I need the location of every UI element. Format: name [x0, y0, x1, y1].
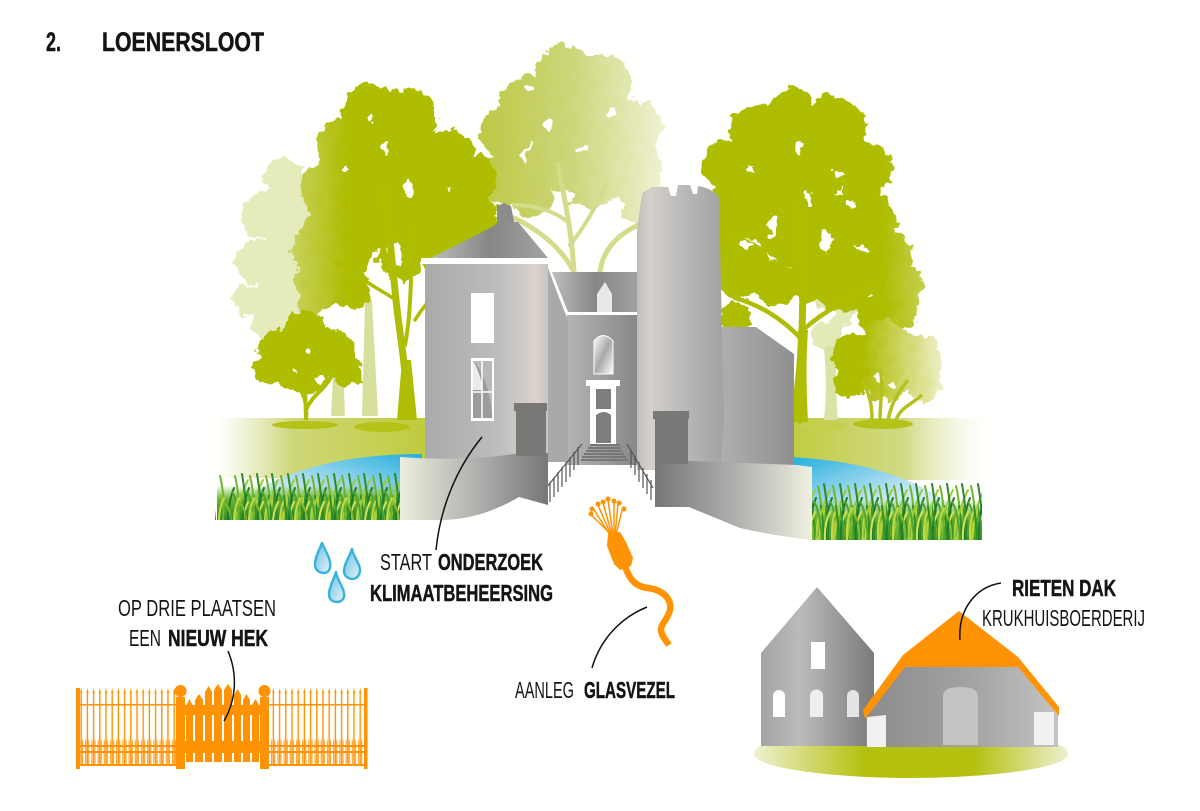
title [46, 27, 264, 57]
chimney [497, 203, 515, 226]
reeds right [812, 480, 982, 540]
tree: large right [700, 88, 923, 422]
reeds left [215, 473, 400, 520]
barn door [943, 687, 978, 745]
gate [174, 684, 270, 769]
tree: large left [290, 84, 499, 420]
pillar right [653, 411, 689, 464]
label: GLASVEZEL [584, 677, 675, 703]
ground right [785, 418, 983, 480]
leader line [224, 651, 234, 721]
label: OP DRIE PLAATSEN [118, 595, 276, 621]
callout: fibre [515, 607, 675, 703]
right tower [637, 185, 724, 470]
callout: thatched roof [960, 575, 1145, 640]
railings [546, 444, 653, 502]
door [586, 380, 620, 444]
label: EEN [129, 625, 161, 651]
label: AANLEG [515, 677, 574, 703]
lower window [471, 358, 494, 421]
tree: centre, fading [480, 44, 670, 272]
lawn under farmhouse [754, 745, 1068, 778]
callout: climate study [370, 437, 553, 606]
middle window [594, 336, 613, 374]
left tower [425, 264, 548, 462]
leader line [592, 607, 647, 668]
pond right [790, 457, 960, 525]
left fence section [76, 684, 177, 769]
tree: small right, fading [799, 318, 944, 430]
stairs [581, 444, 628, 461]
leader line [960, 583, 1001, 640]
icon: fibre optic cable [588, 496, 670, 645]
ground left [218, 418, 428, 478]
label: RIETEN DAK [1012, 575, 1116, 601]
upper window [471, 293, 494, 343]
gabled house [761, 587, 874, 746]
right fence section [268, 684, 368, 769]
left tower roof [431, 222, 548, 258]
annex [718, 327, 794, 470]
label [370, 549, 553, 606]
barn body [866, 665, 1058, 747]
callout: fence [118, 595, 276, 721]
barn side doors [867, 715, 886, 747]
thatched roof [863, 611, 1059, 719]
roof band [421, 258, 549, 264]
label: START [380, 549, 432, 575]
title: 2. [46, 27, 61, 57]
label [515, 677, 675, 703]
wall left [400, 453, 548, 520]
label [118, 595, 276, 651]
castle [400, 185, 812, 540]
pale background trees [232, 158, 860, 420]
pond left [222, 454, 422, 520]
farmhouse [761, 587, 1059, 747]
tree: small left [253, 311, 410, 432]
label: KLIMAATBEHEERSING [370, 580, 553, 606]
leader line [436, 437, 482, 550]
house windows [773, 642, 859, 717]
pillar left [514, 403, 547, 456]
wall right [655, 461, 812, 540]
dormer [597, 282, 612, 312]
label [982, 575, 1145, 631]
side wedge [546, 268, 568, 462]
label: ONDERZOEK [438, 549, 543, 575]
middle wing wall [567, 315, 641, 465]
title: LOENERSLOOT [102, 27, 264, 57]
icon: fence [76, 684, 368, 769]
main roof of middle wing [552, 272, 640, 312]
icon: water drops [315, 543, 360, 602]
label: NIEUW HEK [168, 625, 268, 651]
